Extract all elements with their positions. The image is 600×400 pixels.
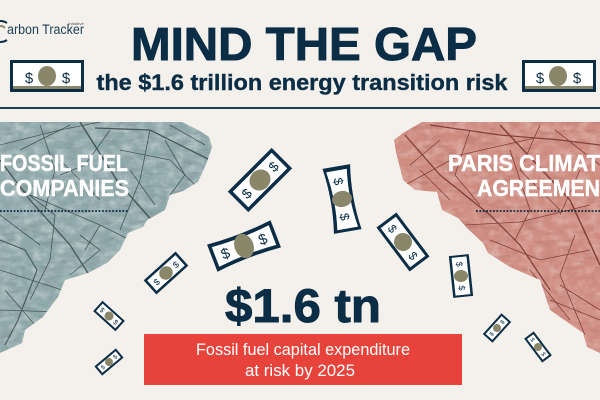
callout: red box <box>144 334 462 385</box>
icon: falling banknote A: $ <box>265 158 282 175</box>
icon: falling banknote D: $ <box>405 249 421 263</box>
icon: header banknote left <box>10 60 84 92</box>
header divider <box>0 107 600 109</box>
panel: Paris climate agreement rock <box>390 120 600 355</box>
icon: falling banknote G <box>93 301 125 331</box>
icon: falling banknote J <box>524 331 552 363</box>
icon: falling banknote C <box>322 164 362 234</box>
logo: Carbon Tracker: Initiative <box>68 21 85 26</box>
heading: Paris climate agreement <box>448 150 600 211</box>
icon: falling banknote H <box>94 348 124 376</box>
subtitle: the $1.6 trillion energy transition risk <box>96 70 508 95</box>
logo: Carbon Tracker <box>0 21 85 42</box>
icon: falling banknote E: $ <box>171 259 181 270</box>
logo: Carbon Tracker: arbon Tracker <box>7 22 84 37</box>
icon: falling banknote H: $ <box>113 354 119 361</box>
big number: $1.6 tn <box>225 279 381 332</box>
icon: falling banknote F: $ <box>454 261 464 267</box>
icon: falling banknote I: $ <box>500 319 507 326</box>
icon: falling banknote B: $ <box>256 230 271 249</box>
icon: falling banknote D: $ <box>385 222 400 236</box>
icon: falling banknote A <box>228 148 292 212</box>
icon: falling banknote B <box>207 220 281 272</box>
icon: falling banknote H: $ <box>100 364 107 371</box>
icon: falling banknote D <box>376 213 430 271</box>
panel: fossil fuel companies rock <box>0 120 215 355</box>
heading: fossil fuel companies: COMPANIES <box>0 175 129 201</box>
callout: red box: Fossil fuel capital expenditure <box>196 341 410 359</box>
title: MIND THE GAP <box>131 18 477 70</box>
icon: falling banknote J: $ <box>528 337 536 344</box>
icon: falling banknote A: $ <box>238 185 255 202</box>
icon: falling banknote I: $ <box>489 331 496 338</box>
icon: header banknote right <box>522 60 596 92</box>
icon: falling banknote E: $ <box>151 277 162 287</box>
icon: falling banknote G: $ <box>98 307 106 315</box>
icon: header banknote left: $ <box>62 70 71 87</box>
icon: falling banknote C: $ <box>330 176 347 187</box>
heading: fossil fuel companies: FOSSIL FUEL <box>0 150 128 176</box>
icon: falling banknote F: $ <box>457 285 467 291</box>
icon: falling banknote J: $ <box>539 352 546 358</box>
icon: falling banknote F <box>449 254 473 298</box>
heading: fossil fuel companies <box>0 150 129 211</box>
icon: header banknote right: $ <box>536 70 545 87</box>
icon: falling banknote G: $ <box>111 319 119 327</box>
icon: header banknote right: $ <box>573 70 582 87</box>
icon: header banknote left: $ <box>25 70 34 87</box>
icon: falling banknote E <box>144 252 188 294</box>
icon: falling banknote C: $ <box>337 212 353 222</box>
callout: red box: at risk by 2025 <box>245 362 355 380</box>
icon: falling banknote B: $ <box>219 244 233 264</box>
icon: falling banknote I <box>483 313 511 343</box>
